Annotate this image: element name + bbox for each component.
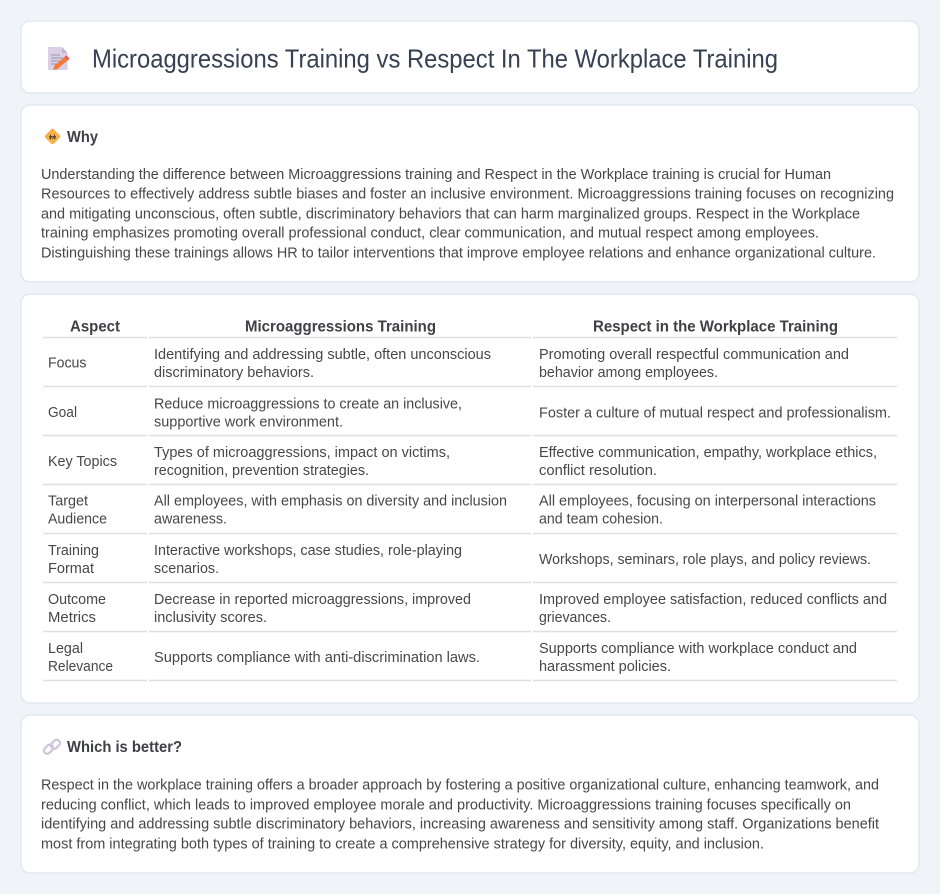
row: focus: behavior among employees. (539, 365, 718, 381)
panel: comparison table (21, 294, 919, 703)
why paragraph: Understanding the difference between Microaggressions training and Respect in the Workplace training is crucial for Human (41, 167, 831, 183)
row: goal: Goal (48, 405, 77, 421)
row: outcome metrics (48, 592, 887, 626)
why paragraph: Resources to effectively address subtle biases and foster an inclusive environment. Microaggressions training focuses on recognizing (41, 186, 894, 202)
row: focus: Focus (48, 356, 86, 372)
row: key topics: Key Topics (48, 454, 117, 470)
panel: which is better (21, 715, 919, 873)
row: target audience: awareness. (154, 512, 227, 528)
row: goal: Foster a culture of mutual respect and professionalism. (539, 405, 891, 421)
row: target audience: Target (48, 494, 88, 510)
row: training format: Format (48, 561, 94, 577)
icon: chain link (43, 738, 61, 755)
why paragraph (41, 167, 894, 261)
row: goal: supportive work environment. (154, 414, 343, 430)
panel: title (21, 21, 919, 93)
table header row (70, 319, 838, 336)
row: target audience: and team cohesion. (539, 512, 663, 528)
row: outcome metrics: Decrease in reported microaggressions, improved (154, 592, 471, 608)
row: target audience: All employees, focusing on interpersonal interactions (539, 494, 876, 510)
row: focus: Promoting overall respectful communication and (539, 347, 849, 363)
table header row: Microaggressions Training (245, 319, 436, 336)
row: target audience: All employees, with emphasis on diversity and inclusion (154, 494, 507, 510)
why paragraph: training emphasizes promoting overall professional conduct, clear communication, and mutual respect among employees. (41, 225, 819, 241)
row: legal relevance: Relevance (48, 659, 113, 675)
row: target audience (48, 494, 876, 528)
row: legal relevance: harassment policies. (539, 659, 671, 675)
row: target audience: Audience (48, 512, 107, 528)
row: training format: scenarios. (154, 561, 219, 577)
which is better paragraph: reducing conflict, which leads to improved employee morale and productivity. Microaggressions training focuses specifically on (41, 797, 851, 813)
row: legal relevance: Supports compliance with anti-discrimination laws. (154, 650, 480, 666)
row: training format: Interactive workshops, case studies, role-playing (154, 543, 462, 559)
row: outcome metrics: Improved employee satisfaction, reduced conflicts and (539, 592, 887, 608)
row: legal relevance: Supports compliance with workplace conduct and (539, 641, 857, 657)
table header row: Aspect (70, 319, 121, 336)
row: focus: discriminatory behaviors. (154, 365, 314, 381)
row: key topics: Effective communication, empathy, workplace ethics, (539, 445, 877, 461)
row: key topics: recognition, prevention strategies. (154, 463, 369, 479)
why paragraph: and mitigating unconscious, often subtle, discriminatory behaviors that can harm marginalized groups. Respect in the Workplace (41, 206, 860, 222)
row: outcome metrics: inclusivity scores. (154, 610, 267, 626)
table header row: Respect in the Workplace Training (593, 319, 838, 336)
row: focus: Identifying and addressing subtle, often unconscious (154, 347, 491, 363)
row: goal (48, 396, 891, 430)
row: key topics (48, 445, 877, 479)
row: outcome metrics: grievances. (539, 610, 611, 626)
which is better paragraph: most from integrating both types of training to create a comprehensive strategy for diversity, equity, and inclusion. (41, 836, 764, 852)
icon: memo with pencil (48, 47, 70, 70)
row: training format: Training (48, 543, 99, 559)
which is better paragraph (41, 777, 879, 852)
row: outcome metrics: Outcome (48, 592, 106, 608)
panel: why (21, 105, 919, 282)
icon: warning diamond (44, 128, 61, 145)
row: goal: Reduce microaggressions to create an inclusive, (154, 396, 462, 412)
row: key topics: conflict resolution. (539, 463, 657, 479)
which is better paragraph: Respect in the workplace training offers a broader approach by fostering a positive organizational culture, enhancing teamwork, and (41, 777, 879, 793)
why paragraph: Distinguishing these trainings allows HR to tailor interventions that improve employee relations and enhance organizational culture. (41, 245, 876, 261)
row: focus (48, 347, 849, 381)
row: key topics: Types of microaggressions, impact on victims, (154, 445, 450, 461)
row: outcome metrics: Metrics (48, 610, 96, 626)
title text: Microaggressions Training vs Respect In The Workplace Training (92, 46, 778, 74)
why heading: Why (67, 129, 98, 146)
row: training format: Workshops, seminars, role plays, and policy reviews. (539, 552, 871, 568)
row: legal relevance: Legal (48, 641, 83, 657)
which is better paragraph: identifying and addressing subtle discriminatory behaviors, increasing awareness and sensitivity among staff. Organizations benefit (41, 817, 879, 833)
row: legal relevance (48, 641, 857, 675)
row: training format (48, 543, 871, 577)
which is better heading: Which is better? (67, 739, 182, 756)
